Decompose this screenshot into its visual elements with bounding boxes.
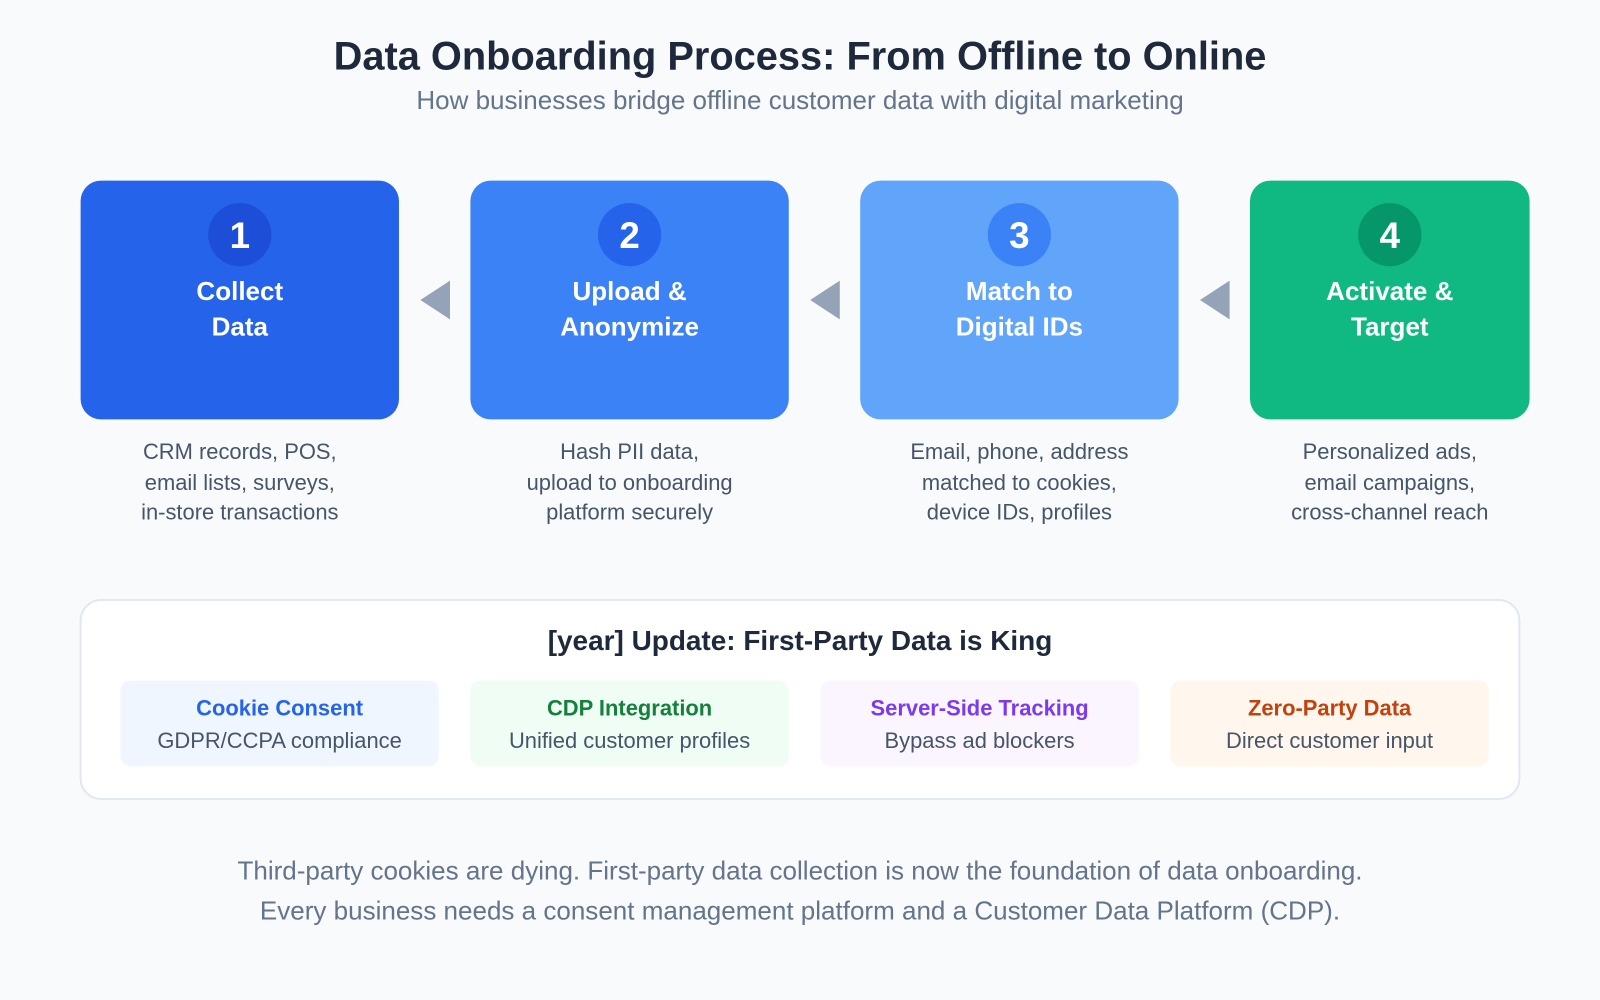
step 4 card: Activate & bbox=[1326, 276, 1453, 306]
card: zero-party data bbox=[1170, 681, 1489, 766]
footer text: Third-party cookies are dying. First-party data collection is now the foundation of data onboarding. bbox=[237, 856, 1363, 886]
subtitle: How businesses bridge offline customer data with digital marketing bbox=[416, 85, 1184, 115]
card: CDP integration bbox=[470, 681, 789, 766]
step 1 card: Data bbox=[212, 312, 269, 342]
step 3 card bbox=[860, 181, 1179, 419]
arrow 3 bbox=[1200, 281, 1230, 319]
card: CDP integration: CDP Integration bbox=[547, 695, 712, 720]
card: zero-party data: Zero-Party Data bbox=[1248, 695, 1412, 720]
step 1 description bbox=[141, 439, 339, 524]
card: server-side tracking: Bypass ad blockers bbox=[885, 728, 1075, 753]
step 4 description bbox=[1291, 439, 1488, 524]
title: Data Onboarding Process: From Offline to Online bbox=[334, 34, 1266, 78]
step 2 description bbox=[527, 439, 733, 524]
step 3 description bbox=[910, 439, 1128, 524]
step 2 description: Hash PII data, bbox=[560, 439, 699, 464]
step 2 description: upload to onboarding bbox=[527, 470, 733, 495]
card: server-side tracking: Server-Side Tracking bbox=[871, 695, 1089, 720]
step 3 card: 3 bbox=[1009, 215, 1030, 256]
card: CDP integration: Unified customer profiles bbox=[509, 728, 750, 753]
step 2 card bbox=[470, 181, 789, 419]
footer text bbox=[237, 856, 1363, 925]
step 4 card bbox=[1250, 181, 1530, 419]
step 2 card: Upload & bbox=[572, 276, 687, 306]
step 4 description: cross-channel reach bbox=[1291, 499, 1488, 524]
step 2 card: Anonymize bbox=[560, 312, 699, 342]
step 3 description: matched to cookies, bbox=[922, 470, 1117, 495]
arrow 1 bbox=[420, 281, 450, 319]
step 2 description: platform securely bbox=[546, 499, 713, 524]
card: server-side tracking bbox=[820, 681, 1139, 766]
card: cookie consent bbox=[120, 681, 439, 766]
arrow 2 bbox=[810, 281, 840, 319]
step 2 card: 2 bbox=[619, 215, 640, 256]
step 4 description: email campaigns, bbox=[1304, 470, 1475, 495]
panel: first-party update bbox=[81, 600, 1519, 799]
step 4 card: Target bbox=[1351, 312, 1429, 342]
step 1 card: Collect bbox=[196, 276, 283, 306]
card: cookie consent: GDPR/CCPA compliance bbox=[157, 728, 402, 753]
step 3 description: device IDs, profiles bbox=[927, 499, 1112, 524]
step 1 card: 1 bbox=[230, 215, 250, 256]
card: zero-party data: Direct customer input bbox=[1226, 728, 1433, 753]
footer text: Every business needs a consent management platform and a Customer Data Platform (CDP). bbox=[260, 895, 1340, 925]
step 3 description: Email, phone, address bbox=[910, 439, 1128, 464]
step 1 card bbox=[81, 181, 399, 419]
step 1 description: in-store transactions bbox=[141, 499, 339, 524]
step 1 description: CRM records, POS, bbox=[143, 439, 337, 464]
card: cookie consent: Cookie Consent bbox=[196, 695, 364, 720]
panel heading: [year] Update: First-Party Data is King bbox=[548, 625, 1052, 656]
step 1 description: email lists, surveys, bbox=[145, 470, 335, 495]
step 4 description: Personalized ads, bbox=[1303, 439, 1477, 464]
step 3 card: Digital IDs bbox=[956, 312, 1083, 342]
step 4 card: 4 bbox=[1380, 215, 1401, 256]
step 3 card: Match to bbox=[966, 276, 1073, 306]
